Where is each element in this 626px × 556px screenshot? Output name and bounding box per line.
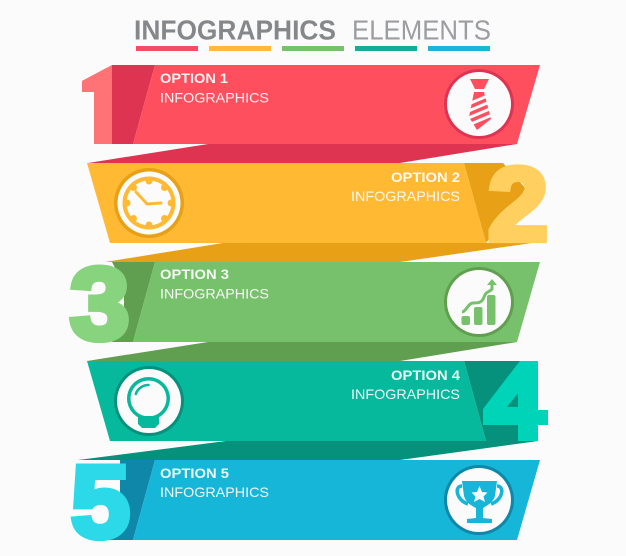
fold: yellow to green bbox=[105, 243, 532, 262]
icon: trophy bbox=[444, 465, 514, 535]
number 1: 1 bbox=[72, 45, 133, 168]
option 4 subtitle: INFOGRAPHICS bbox=[351, 386, 460, 402]
number 2: 2 bbox=[488, 147, 548, 263]
panel: option 2 bbox=[87, 147, 548, 263]
number 3: 3 bbox=[70, 247, 130, 361]
icon: tie bbox=[444, 69, 514, 139]
option 1 label: OPTION 1 bbox=[160, 70, 228, 86]
panel: option 4 bbox=[87, 361, 548, 441]
icon: growth chart bbox=[444, 267, 514, 337]
fold: red to yellow bbox=[88, 144, 517, 163]
title colour underlines bbox=[136, 46, 490, 51]
option 5 label: OPTION 5 bbox=[160, 465, 229, 481]
option 2 subtitle: INFOGRAPHICS bbox=[351, 188, 460, 204]
option 3 subtitle: INFOGRAPHICS bbox=[160, 286, 269, 302]
fold: green to teal bbox=[87, 342, 517, 361]
option 5 subtitle: INFOGRAPHICS bbox=[160, 484, 269, 500]
title: ELEMENTS bbox=[352, 14, 491, 46]
panel: option 1 bbox=[82, 65, 540, 144]
panel: option 5 bbox=[71, 446, 540, 556]
option 4 label: OPTION 4 bbox=[391, 367, 460, 383]
icon: light bulb bbox=[114, 366, 184, 436]
option 1 subtitle: INFOGRAPHICS bbox=[160, 90, 269, 106]
title bbox=[134, 14, 491, 46]
icon: clock bbox=[114, 168, 184, 238]
option 2 label: OPTION 2 bbox=[391, 169, 460, 185]
title: INFOGRAPHICS bbox=[134, 14, 336, 46]
number 4: 4 bbox=[480, 342, 541, 465]
panel: option 3 bbox=[70, 247, 540, 361]
fold: teal to blue bbox=[78, 441, 538, 460]
option 3 label: OPTION 3 bbox=[160, 266, 229, 282]
